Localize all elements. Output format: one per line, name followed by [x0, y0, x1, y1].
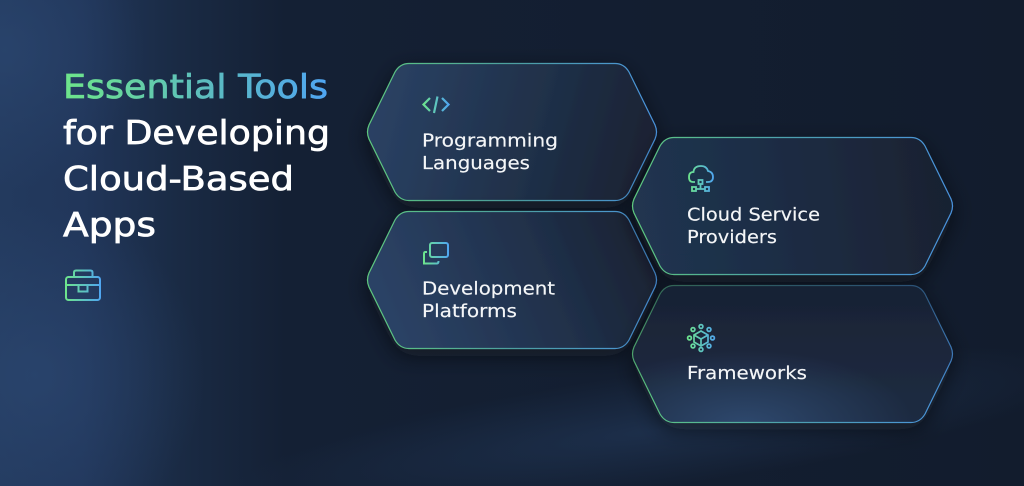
label: development platforms: Development: [422, 278, 555, 300]
panel: programming languages: [368, 64, 656, 200]
label: programming languages: Programming: [422, 130, 558, 152]
icon: windows: [424, 243, 448, 264]
title: for Developing: [63, 113, 330, 152]
label: cloud service providers: Providers: [687, 227, 777, 248]
label: development platforms: Platforms: [422, 301, 517, 322]
title: Essential Tools: [63, 67, 328, 106]
label: frameworks: Frameworks: [687, 363, 807, 384]
label: programming languages: Languages: [422, 153, 530, 174]
icon: cube network: [688, 325, 714, 351]
title: Apps: [63, 205, 156, 244]
icon: cloud network: [689, 166, 713, 191]
panel: frameworks: [632, 286, 952, 422]
icon: code: [424, 96, 448, 113]
label: cloud service providers: Cloud Service: [687, 204, 820, 226]
icon: toolbox: [66, 270, 100, 300]
panel: development platforms: [368, 212, 656, 348]
panel: cloud service providers: [632, 138, 952, 274]
title: [63, 67, 330, 244]
title: Cloud-Based: [63, 159, 294, 198]
